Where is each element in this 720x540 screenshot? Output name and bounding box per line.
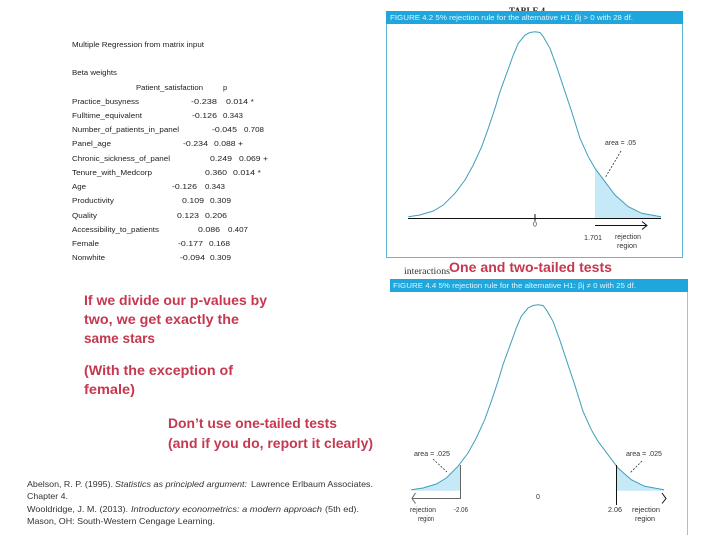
row: tenure: [72, 168, 261, 177]
row: fulltime equivalent: [72, 111, 243, 120]
row: age: 0.343: [205, 182, 225, 191]
row: nonwhite: [72, 253, 231, 262]
label: rejection region: rejection: [615, 234, 641, 241]
row: chronic sickness: [72, 154, 269, 163]
row: nonwhite: Nonwhite: [72, 253, 105, 262]
label: left rejection region: [410, 507, 436, 523]
references: Mason, OH: South-Western Cengage Learning.: [27, 516, 215, 526]
row: accessibility: 0.407: [228, 225, 248, 234]
row: panel age: 0.088 +: [214, 139, 244, 148]
row: panel age: [72, 139, 244, 148]
callout: area .05: [605, 140, 636, 178]
callout: area .05: area = .05: [605, 140, 636, 147]
row: chronic sickness: 0.249: [210, 154, 232, 163]
horizontal axis: [408, 214, 661, 221]
regression output table: [72, 40, 269, 262]
row: age: Age: [72, 182, 86, 191]
text block: dividing p-values: two, we get exactly the: [84, 312, 240, 327]
figure header bar: FIGURE 4.2 5% rejection rule for the alternative H1: βj > 0 with 28 df.: [390, 15, 633, 22]
figure header bar: FIGURE 4.4 5% rejection rule for the alternative H1: βj ≠ 0 with 25 df.: [393, 283, 636, 290]
shaded left tail: [411, 464, 460, 491]
text block: exception: (With the exception of: [84, 363, 234, 378]
row: chronic sickness: Chronic_sickness_of_panel: [72, 154, 170, 163]
row: panel age: Panel_age: [72, 139, 111, 148]
row: age: -0.126: [172, 182, 197, 191]
label: left rejection region: rejection: [410, 507, 436, 514]
label: right rejection region: rejection: [632, 507, 660, 514]
clipped table caption behind figure: TABLE 4: [509, 6, 545, 16]
row: number of patients: [72, 125, 264, 134]
references: Lawrence Erlbaum Associates.: [251, 479, 373, 489]
row: nonwhite: 0.309: [210, 253, 231, 262]
row: productivity: [72, 196, 231, 205]
label: rejection region: [615, 234, 641, 250]
text block: exception: [84, 363, 234, 397]
row: tenure: 0.360: [205, 168, 227, 177]
row: fulltime equivalent: Fulltime_equivalent: [72, 111, 143, 120]
row: tenure: 0.014 *: [233, 168, 261, 177]
callout: left area: [414, 451, 450, 472]
table title: Multiple Regression from matrix input: [72, 40, 205, 49]
references: Introductory econometrics: a modern approach: [131, 504, 322, 514]
row: female: [72, 239, 230, 248]
column headings: p: [223, 83, 227, 92]
row: accessibility: 0.086: [198, 225, 220, 234]
row: practice busyness: -0.238: [191, 97, 217, 106]
label: centre zero: 0: [536, 494, 540, 501]
text block: exception: female): [84, 382, 135, 397]
references: [27, 479, 373, 526]
row: productivity: Productivity: [72, 196, 114, 205]
row: age: [72, 182, 225, 191]
figure right border: [686, 279, 688, 535]
bell curve: [411, 305, 664, 490]
row: chronic sickness: 0.069 +: [239, 154, 269, 163]
panel: one-tailed figure: [386, 11, 683, 258]
references: Chapter 4.: [27, 491, 68, 501]
figure header bar: [390, 279, 688, 292]
row: tenure: Tenure_with_Medcorp: [72, 168, 152, 177]
label: right rejection region: region: [635, 516, 655, 523]
row: fulltime equivalent: -0.126: [192, 111, 217, 120]
text block: one-tailed advice: [168, 416, 373, 451]
label: right rejection region: [632, 507, 660, 523]
row: female: 0.168: [209, 239, 230, 248]
row: practice busyness: 0.014 *: [226, 97, 254, 106]
clipped serif word beside heading: interactions: [404, 267, 450, 277]
text block: one-tailed advice: Don’t use one-tailed tests: [168, 416, 337, 431]
left critical line and arrow: [412, 465, 460, 504]
figure frame: [386, 12, 682, 258]
references: Statistics as principled argument:: [115, 479, 248, 489]
bell curve: [408, 32, 661, 217]
row: quality: Quality: [72, 211, 97, 220]
row: number of patients: Number_of_patients_in_panel: [72, 125, 179, 134]
row: practice busyness: [72, 97, 254, 106]
label: left rejection region: region: [418, 516, 434, 523]
row: accessibility: Accessibility_to_patients: [72, 225, 159, 234]
shaded right tail: [616, 466, 664, 491]
callout: right area: area = .025: [626, 451, 662, 458]
label: rejection region: region: [617, 243, 637, 250]
row: accessibility: [72, 225, 248, 234]
arrow: rejection direction: [595, 222, 647, 230]
column headings: Patient_satisfaction: [136, 83, 203, 92]
label: positive critical value: 2.06: [608, 507, 622, 514]
row: productivity: 0.309: [210, 196, 231, 205]
text block: dividing p-values: If we divide our p-values by: [84, 293, 268, 308]
callout: right area: [626, 451, 662, 473]
references: (5th ed).: [325, 504, 359, 514]
row: quality: 0.123: [177, 211, 199, 220]
text block: dividing p-values: [84, 293, 268, 346]
right critical line and arrow: [616, 465, 666, 505]
row: quality: 0.206: [205, 211, 227, 220]
row: panel age: -0.234: [183, 139, 208, 148]
callout: left area: area = .025: [414, 451, 450, 458]
row: nonwhite: -0.094: [180, 253, 205, 262]
row: female: -0.177: [178, 239, 203, 248]
row: female: Female: [72, 239, 99, 248]
label: critical value: 1.701: [584, 235, 602, 242]
row: number of patients: 0.708: [244, 125, 264, 134]
row: number of patients: -0.045: [212, 125, 237, 134]
heading: one and two-tailed tests: One and two-tailed tests: [449, 260, 612, 275]
panel: two-tailed figure: [390, 279, 688, 535]
label: negative critical value: -2.06: [454, 507, 468, 514]
row: practice busyness: Practice_busyness: [72, 97, 139, 106]
text block: dividing p-values: same stars: [84, 331, 155, 346]
row: productivity: 0.109: [182, 196, 204, 205]
shaded rejection region: [595, 168, 661, 218]
label: centre zero: 0: [533, 222, 537, 228]
text block: one-tailed advice: (and if you do, report it clearly): [168, 436, 373, 451]
row: quality: [72, 211, 227, 220]
table subtitle: Beta weights: [72, 68, 117, 77]
figure header bar: [386, 11, 683, 24]
references: Wooldridge, J. M. (2013).: [27, 504, 128, 514]
row: fulltime equivalent: 0.343: [223, 111, 243, 120]
references: Abelson, R. P. (1995).: [27, 479, 113, 489]
